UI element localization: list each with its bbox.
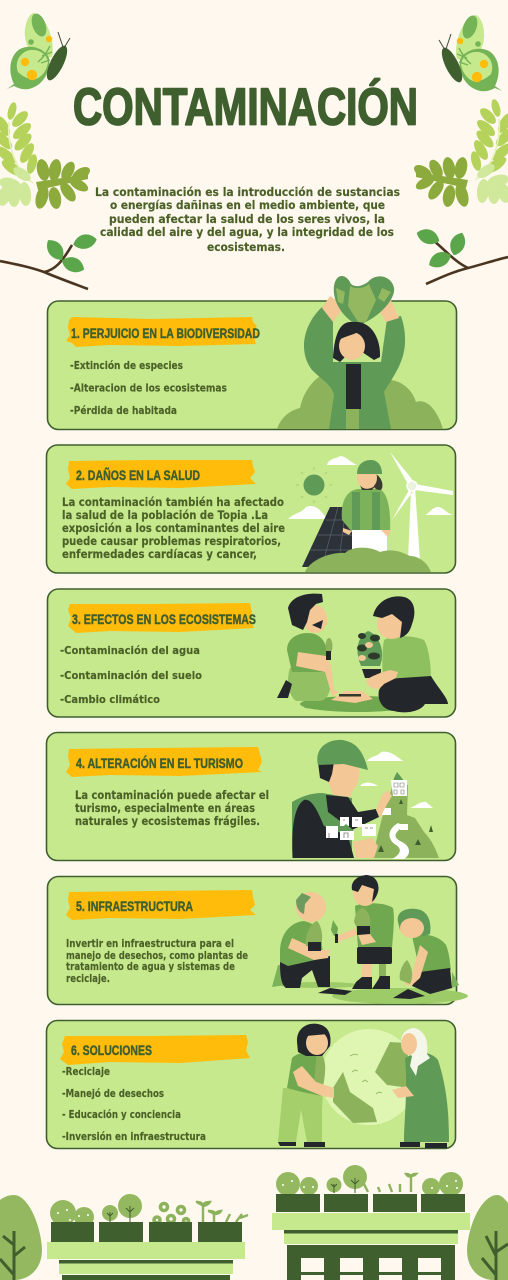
intro text: o energías dañinas en el medio ambiente, que — [110, 198, 385, 212]
panel: 4 turismo — [46, 732, 456, 860]
heading: 5. INFRAESTRUCTURA — [76, 898, 193, 914]
panel: 3 ecosistemas — [48, 589, 456, 717]
heading highlight — [66, 460, 256, 489]
paragraph — [75, 788, 269, 828]
paragraph: exposición a los contaminantes del aire — [62, 521, 285, 535]
list: -Pérdida de habitada — [70, 404, 177, 417]
panel: 6 soluciones — [46, 1020, 456, 1148]
heading highlight — [66, 747, 262, 777]
paragraph: La contaminación también ha afectado — [62, 495, 284, 509]
list: -Alteracion de los ecosistemas — [70, 382, 227, 394]
heading highlight — [66, 890, 256, 920]
paragraph: tratamiento de agua y sistemas de — [66, 960, 235, 973]
paragraph: la salud de la población de Topia .La — [62, 508, 268, 522]
illustration: woman holding heart globe — [277, 276, 443, 429]
icon: right branch — [414, 226, 508, 284]
paragraph: puede causar problemas respiratorios, — [62, 534, 281, 548]
card — [48, 301, 456, 430]
illustration: man with village hill — [292, 740, 439, 859]
intro text: La contaminación es la introducción de sustancias — [95, 185, 400, 199]
heading: 4. ALTERACIÓN EN EL TURISMO — [76, 754, 243, 771]
paragraph: naturales y ecosistemas frágiles. — [75, 814, 260, 828]
illustration: right rooftop building — [272, 1165, 470, 1280]
paragraph: reciclaje. — [66, 972, 110, 985]
card — [46, 1020, 456, 1148]
illustration: three people planting — [272, 875, 468, 1004]
icon: right fern — [469, 98, 508, 204]
illustration: worker, solar panel and wind turbine — [288, 452, 453, 572]
card — [48, 589, 456, 717]
heading: 1. PERJUICIO EN LA BIODIVERSIDAD — [71, 325, 260, 341]
list — [60, 644, 202, 706]
paragraph — [62, 495, 285, 561]
illustration: two women holding earth — [278, 1024, 449, 1148]
icon: left branch — [0, 232, 98, 289]
heading: 2. DAÑOS EN LA SALUD — [76, 466, 200, 483]
heading highlight — [66, 317, 260, 347]
title: CONTAMINACIÓN — [73, 78, 418, 136]
list: - Educación y conciencia — [62, 1108, 181, 1121]
heading highlight — [60, 1035, 250, 1065]
list: -Extinción de especies — [70, 359, 183, 372]
list: -Contaminación del suelo — [60, 669, 202, 682]
panel: 5 infraestructura — [48, 875, 468, 1004]
list: -Cambio climático — [60, 693, 160, 706]
list: -Contaminación del agua — [60, 644, 200, 657]
icon: left butterfly — [7, 12, 71, 89]
paragraph — [66, 937, 248, 985]
illustration: right tree — [467, 1195, 508, 1280]
paragraph: manejo de desechos, como plantas de — [66, 949, 248, 962]
illustration: left rooftop garden — [47, 1194, 248, 1280]
intro text: calidad del aire y del agua, y la integridad de los — [100, 225, 394, 239]
heading highlight — [68, 603, 254, 633]
intro text — [95, 185, 400, 254]
intro text: ecosistemas. — [207, 240, 285, 254]
paragraph: Invertir en infraestructura para el — [66, 937, 234, 950]
illustration: two boys planting — [277, 594, 448, 712]
paragraph: turismo, especialmente en áreas — [75, 801, 255, 815]
list — [70, 359, 227, 417]
icon: left fern — [0, 101, 39, 207]
heading: 3. EFECTOS EN LOS ECOSISTEMAS — [72, 611, 256, 627]
icon: left oak leaf — [33, 158, 92, 210]
icon: right oak leaf — [412, 156, 471, 208]
heading: 6. SOLUCIONES — [71, 1042, 152, 1058]
illustration: left tree — [0, 1195, 42, 1280]
panel: 1 biodiversidad — [48, 276, 456, 430]
paragraph: enfermedades cardíacas y cancer, — [62, 547, 257, 561]
panel: 2 salud — [46, 445, 456, 573]
paragraph: La contaminación puede afectar el — [75, 788, 269, 802]
card — [48, 876, 456, 1004]
card — [46, 732, 456, 860]
card — [46, 445, 456, 573]
list — [62, 1065, 206, 1143]
intro text: pueden afectar la salud de los seres vivos, la — [109, 212, 385, 226]
list: -Reciclaje — [62, 1065, 110, 1078]
icon: right butterfly — [438, 14, 502, 91]
list: -Manejó de desechos — [62, 1087, 164, 1100]
list: -Inversión en infraestructura — [62, 1130, 206, 1143]
